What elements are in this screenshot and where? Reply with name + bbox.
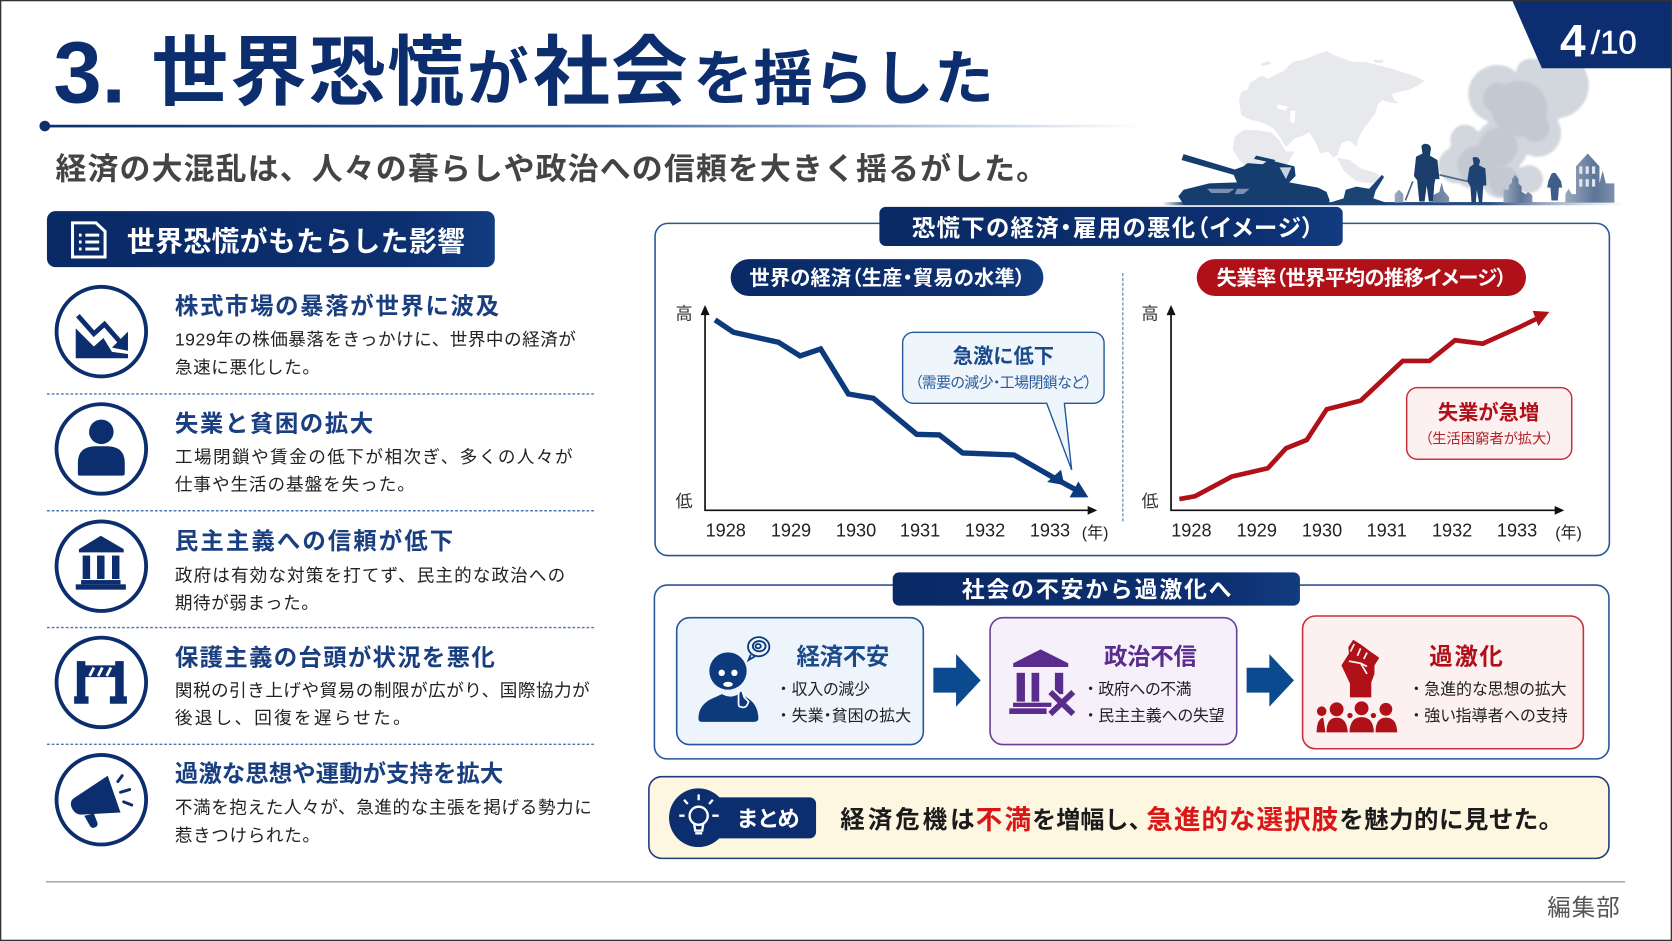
title: [53, 24, 994, 122]
title underline: [39, 121, 1143, 131]
left section header: [47, 211, 495, 267]
line chart: world economy: 低: [676, 492, 693, 511]
panel heading: [879, 207, 1343, 246]
callout: unemployment surge: （生活困窮者が拡大）: [1425, 430, 1554, 447]
title: を揺らした: [693, 45, 994, 112]
ruined city: [1395, 154, 1614, 203]
list item: democracy: 政府は有効な対策を打てず、民主的な政治への: [175, 565, 565, 585]
chart title pill: 世界の経済（生産・貿易の水準）: [749, 267, 1025, 290]
arrow: [1247, 654, 1294, 707]
chart title pill: [1197, 259, 1526, 296]
list item: protectionism: [57, 638, 590, 728]
badge: summary: [669, 788, 816, 847]
summary sentence: 不満: [976, 805, 1031, 835]
callout: sharp fall: 急激に低下: [953, 345, 1054, 368]
line chart: unemployment: 高: [1141, 305, 1159, 324]
world map: [1233, 51, 1425, 188]
summary box: [649, 777, 1609, 858]
box: radicalization: 強い指導者への支持: [1424, 706, 1568, 725]
axes: [701, 305, 1097, 515]
panel heading: 社会の不安から過激化へ: [962, 577, 1232, 603]
line chart: unemployment: 1929: [1237, 520, 1277, 540]
panel: economy and employment charts: [655, 207, 1609, 556]
icon: worried person: [698, 637, 769, 722]
box: economic anxiety: [677, 618, 923, 745]
page number tab: /10: [1591, 25, 1637, 61]
line chart: world economy: (年): [1082, 524, 1108, 542]
list item: stock crash: [57, 287, 576, 377]
title: 世界恐慌: [151, 31, 464, 116]
list item: radical movements: 過激な思想や運動が支持を拡大: [175, 760, 503, 787]
line chart: unemployment: 1928: [1171, 520, 1212, 540]
summary sentence: 経済危機は: [840, 806, 975, 834]
icon: light bulb: [679, 794, 719, 833]
box: economic anxiety: 収入の減少: [792, 680, 870, 698]
page number tab: [1512, 0, 1672, 68]
tank: [1178, 154, 1330, 205]
line chart: unemployment: 1932: [1432, 520, 1472, 540]
list item: protectionism: 後退し、回復を遅らせた。: [175, 708, 411, 728]
list item: unemployment: 失業と貧困の拡大: [175, 410, 373, 436]
title: 社会: [533, 31, 688, 116]
list item: stock crash: 1929年の株価暴落をきっかけに、世界中の経済が: [175, 330, 576, 350]
line chart: unemployment: [1141, 259, 1582, 542]
callout: sharp fall: [903, 332, 1104, 470]
box: political distrust: ・: [1087, 708, 1095, 725]
list item: stock crash: 急速に悪化した。: [175, 357, 320, 377]
left section header: 世界恐慌がもたらした影響: [127, 226, 465, 257]
footer credit: 編集部: [1547, 894, 1620, 920]
box: radicalization: 急進的な思想の拡大: [1424, 679, 1567, 698]
icon: person: [57, 404, 146, 494]
subtitle: 経済の大混乱は、人々の暮らしや政治への信頼を大きく揺るがした。: [55, 152, 1047, 187]
line chart: world economy: 高: [676, 305, 693, 324]
list item: radical movements: 惹きつけられた。: [175, 825, 320, 845]
icon: document list: [73, 223, 105, 257]
list item: stock crash: 株式市場の暴落が世界に波及: [175, 292, 499, 319]
line chart: unemployment: 1933: [1497, 520, 1537, 540]
list item: unemployment: 工場閉鎖や賃金の低下が相次ぎ、多くの人々が: [175, 447, 573, 467]
falling line: [715, 320, 1088, 497]
list item: unemployment: [57, 404, 573, 495]
title: が: [467, 44, 529, 113]
callout: unemployment surge: [1407, 388, 1572, 459]
summary sentence: 急進的な選択肢: [1146, 805, 1339, 835]
small tank: [1330, 175, 1388, 205]
callout: unemployment surge: 失業が急増: [1438, 401, 1539, 425]
list item: radical movements: [57, 755, 592, 845]
box: economic anxiety: ・: [779, 681, 787, 698]
axes: [1167, 305, 1564, 515]
line chart: unemployment: 1930: [1302, 520, 1342, 540]
arrow: [933, 654, 981, 707]
icon: falling chart: [57, 287, 146, 376]
panel heading: [893, 572, 1300, 606]
soldier 2: [1467, 157, 1486, 203]
summary sentence: を魅力的に見せた。: [1339, 806, 1563, 834]
line chart: unemployment: 1931: [1367, 520, 1407, 540]
list item: unemployment: 仕事や生活の基盤を失った。: [175, 475, 415, 495]
summary sentence: [840, 805, 1563, 835]
icon: bank: [57, 521, 146, 611]
list item: democracy: [57, 521, 565, 613]
smoke: [1438, 52, 1589, 198]
box: radicalization: 過激化: [1429, 643, 1503, 669]
summary sentence: を増幅し、: [1032, 807, 1153, 834]
line chart: world economy: 1933: [1030, 520, 1070, 540]
callout: sharp fall: （需要の減少・工場閉鎖など）: [915, 374, 1092, 391]
box: economic anxiety: ・: [779, 708, 787, 725]
line chart: world economy: 1930: [836, 520, 876, 540]
line chart: world economy: 1929: [771, 520, 811, 540]
icon: raised fist and crowd: [1317, 640, 1397, 732]
soldier 1 with rifle: [1414, 144, 1440, 202]
badge: summary: まとめ: [736, 806, 800, 831]
line chart: unemployment: (年): [1555, 524, 1582, 542]
icon: bank with cross: [1009, 649, 1073, 714]
line chart: world economy: 1928: [706, 520, 746, 540]
line chart: world economy: [676, 259, 1108, 542]
list item: democracy: 期待が弱まった。: [175, 593, 319, 613]
line chart: world economy: 1932: [965, 520, 1005, 540]
box: radicalization: ・: [1412, 708, 1420, 725]
icon: barrier gate: [57, 638, 146, 727]
box: political distrust: 政治不信: [1104, 643, 1197, 669]
box: political distrust: 政府への不満: [1098, 680, 1192, 698]
box: political distrust: 民主主義への失望: [1098, 707, 1225, 725]
chart title pill: 失業率（世界平均の推移イメージ）: [1217, 267, 1507, 290]
line chart: world economy: 1931: [900, 520, 940, 540]
page number tab: 4: [1560, 15, 1586, 67]
list item: protectionism: 保護主義の台頭が状況を悪化: [175, 643, 495, 670]
rising line: [1179, 311, 1549, 499]
illustration: world map, smoke, tanks, soldiers, ruined city: [1162, 51, 1627, 205]
ground: [1162, 202, 1627, 205]
line chart: unemployment: 低: [1141, 492, 1159, 511]
panel heading: 恐慌下の経済・雇用の悪化（イメージ）: [912, 215, 1314, 241]
box: radicalization: ・: [1412, 681, 1420, 698]
box: political distrust: [990, 618, 1237, 745]
panel: from social anxiety to radicalization: [654, 572, 1609, 759]
icon: megaphone: [57, 755, 146, 845]
box: economic anxiety: 失業・貧困の拡大: [792, 707, 911, 725]
list item: democracy: 民主主義への信頼が低下: [175, 527, 453, 554]
box: political distrust: ・: [1087, 681, 1095, 698]
box: economic anxiety: 経済不安: [797, 643, 889, 669]
list item: radical movements: 不満を抱えた人々が、急進的な主張を掲げる勢力に: [175, 798, 592, 818]
list item: protectionism: 関税の引き上げや貿易の制限が広がり、国際協力が: [175, 680, 590, 700]
chart title pill: [731, 259, 1043, 296]
title: 3.: [53, 24, 126, 122]
box: radicalization: [1303, 616, 1583, 749]
